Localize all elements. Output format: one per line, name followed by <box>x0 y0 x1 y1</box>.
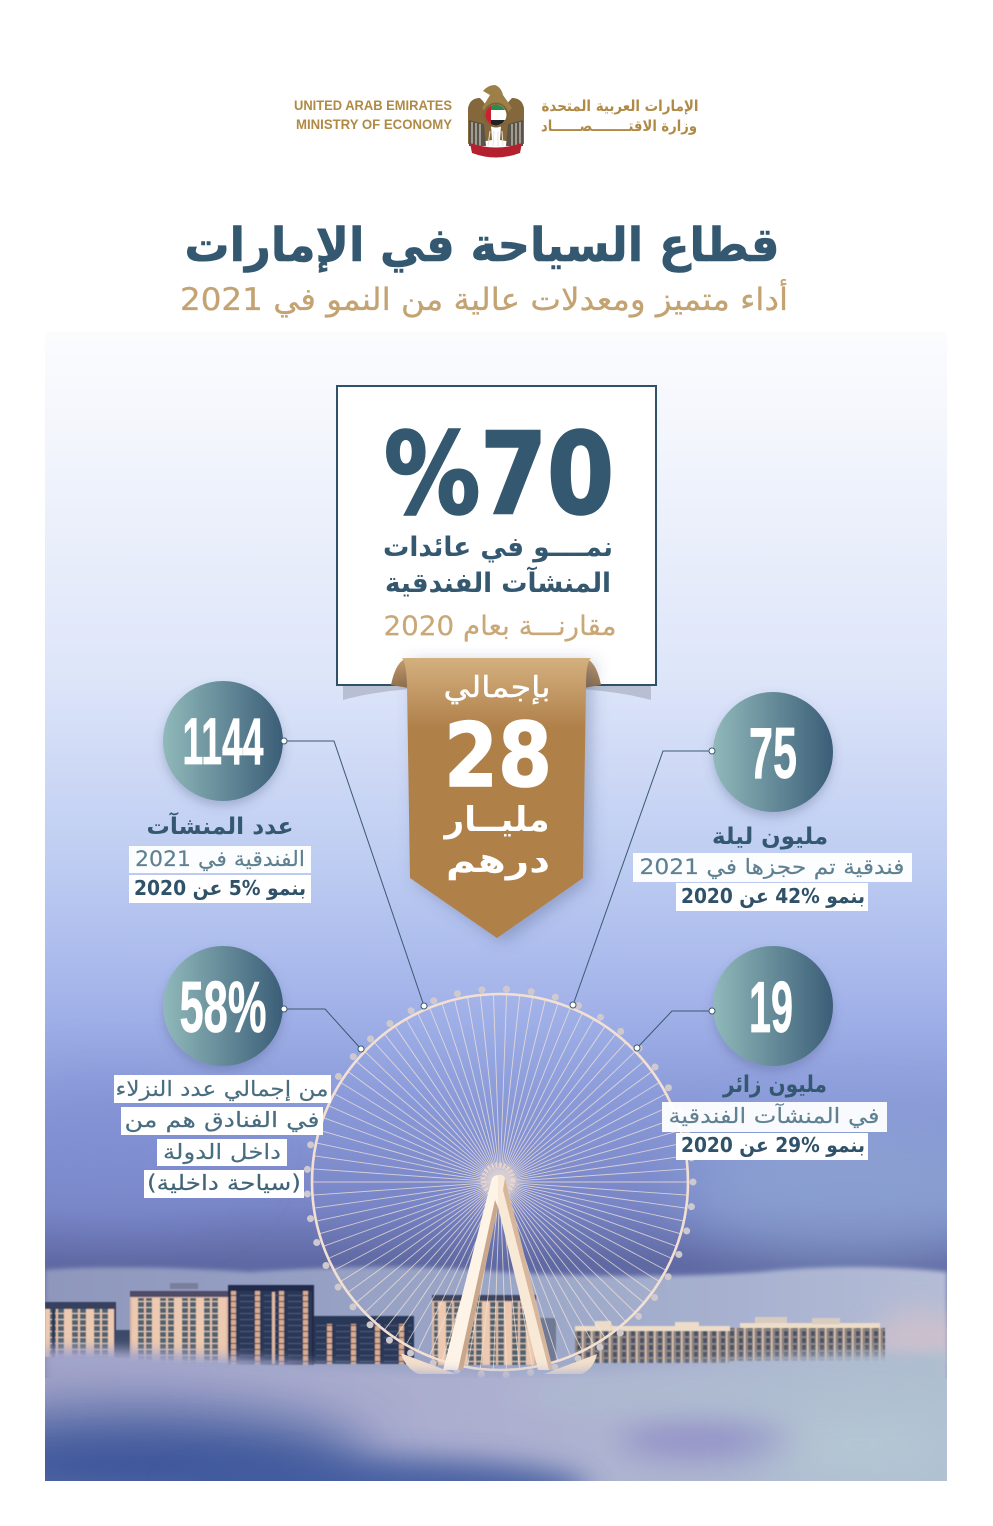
stat: 19 million visitors: بنمو %29 عن 2020 <box>681 1133 865 1157</box>
ribbon unit: مليــار <box>442 800 550 840</box>
stat: 58% of guests: في الفنادق هم من <box>124 1108 320 1133</box>
card text line 1: نمــــو في عائدات <box>383 532 613 563</box>
stat: 58% of guests: داخل الدولة <box>163 1140 281 1164</box>
logo text: Arabic <box>541 97 698 135</box>
header logo <box>294 85 698 158</box>
ribbon label: بإجمالي <box>444 670 550 705</box>
ferris wheel A-frame legs <box>401 1175 597 1374</box>
ferris wheel spokes <box>311 993 689 1371</box>
ribbon number: 28 <box>444 704 552 807</box>
stat: 75 million nights: فندقية تم حجزها في 2021 <box>640 855 904 880</box>
title: قطاع السياحة في الإمارات <box>184 218 780 273</box>
logo text: English: MINISTRY OF ECONOMY <box>296 116 453 132</box>
card comparison text: مقارنـــة بعام 2020 <box>384 611 616 642</box>
stat: 19 million visitors: 19 <box>749 968 793 1048</box>
foreground fog <box>45 1340 947 1481</box>
stat: 58% of guests: (سياحة داخلية) <box>147 1171 301 1195</box>
big number 70%: %70 <box>384 410 614 540</box>
buildings skyline <box>45 1283 885 1365</box>
stat: 1144 hotel establishments <box>129 681 311 903</box>
stat: 19 million visitors: في المنشآت الفندقية <box>668 1103 880 1128</box>
stat: 58% of guests: من إجمالي عدد النزلاء <box>116 1077 328 1102</box>
logo text: Arabic: الإمارات العربية المتحدة <box>542 97 698 115</box>
sky tint right <box>682 1130 947 1270</box>
logo text: Arabic: وزارة الاقتــــــــصــــــاد <box>541 117 697 135</box>
stat: 58% of guests: 58% <box>180 968 266 1048</box>
panel: main growth card <box>337 386 656 700</box>
connector end dots on wheel <box>358 1002 640 1052</box>
stat: 75 million nights: 75 <box>749 714 797 794</box>
card shadow swoosh <box>343 686 651 700</box>
ribbon currency: درهم <box>446 841 550 881</box>
stat: 75 million nights: بنمو %42 عن 2020 <box>681 884 865 908</box>
stat: 1144 hotel establishments: بنمو %5 عن 2020 <box>134 876 306 900</box>
stat: 75 million nights <box>633 692 912 911</box>
stat: 1144 hotel establishments: الفندقية في 2021 <box>135 847 305 871</box>
icon: UAE eagle emblem <box>468 85 524 158</box>
stat: 1144 hotel establishments: 1144 <box>182 704 264 778</box>
distant fog band <box>45 1264 947 1378</box>
subtitle: أداء متميز ومعدلات عالية من النمو في 2021 <box>180 279 788 318</box>
logo text: English: UNITED ARAB EMIRATES <box>294 97 452 113</box>
connector lines <box>284 741 712 1049</box>
stat: 75 million nights: مليون ليلة <box>712 824 828 850</box>
panel: sky background with Ain Dubai photo scene <box>45 384 947 1481</box>
stat: 58% of guests <box>114 946 331 1198</box>
ferris wheel rim and cabins <box>307 989 693 1375</box>
logo text: English <box>294 97 453 132</box>
card text line 2: المنشآت الفندقية <box>385 566 611 599</box>
stat: 1144 hotel establishments: عدد المنشآت <box>146 811 294 840</box>
stat: 19 million visitors: مليون زائر <box>722 1072 827 1098</box>
gold ribbon <box>391 658 601 938</box>
stat: 19 million visitors <box>662 946 887 1160</box>
